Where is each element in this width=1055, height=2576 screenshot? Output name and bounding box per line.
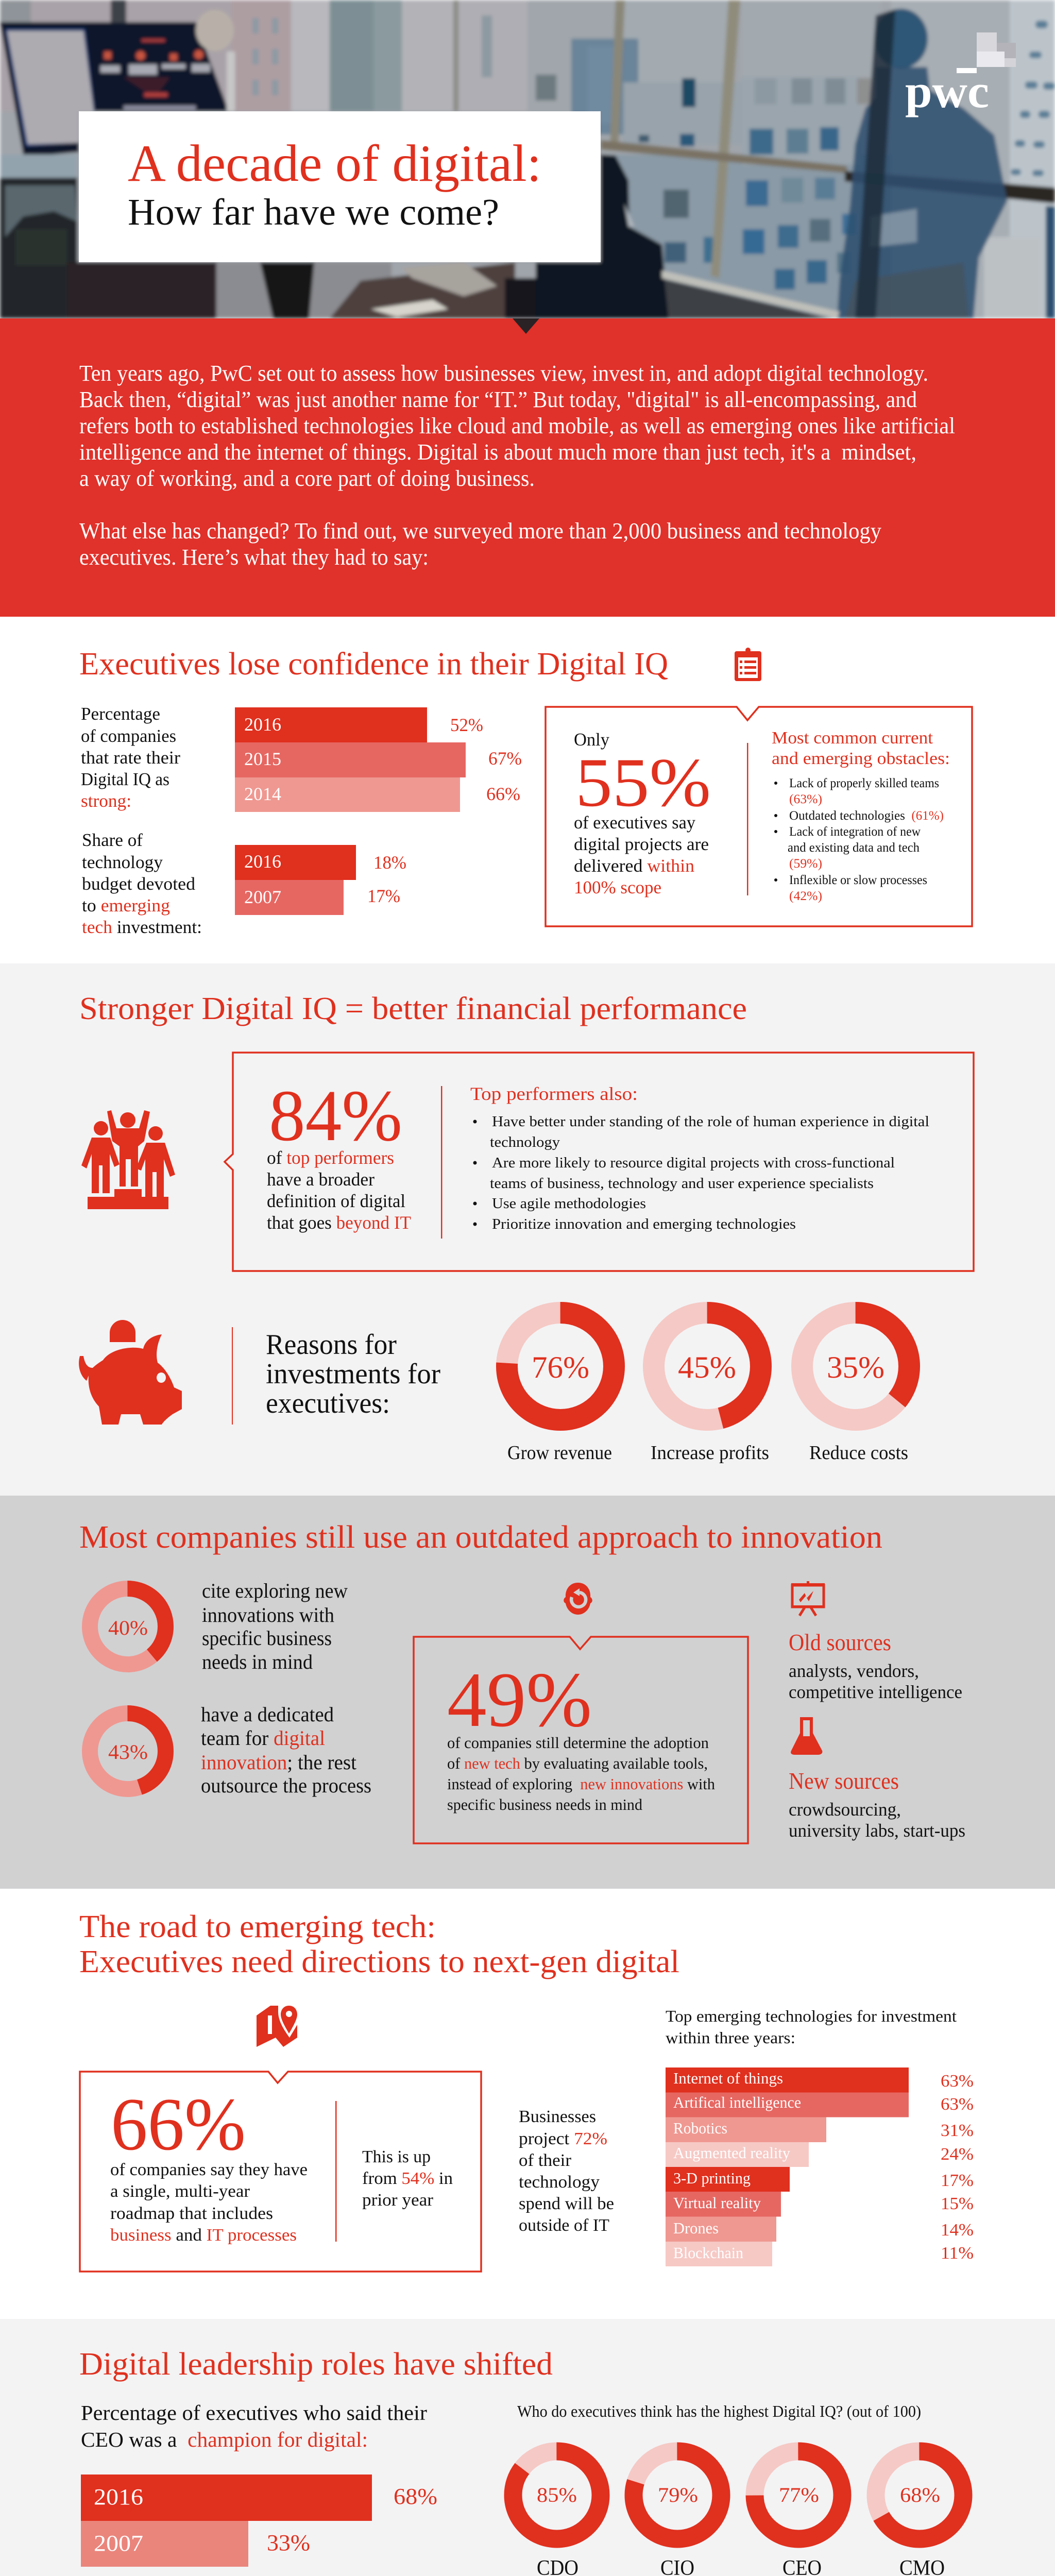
- text: cite exploring: cite exploring new: [202, 1579, 348, 1602]
- panel: hero photo: [0, 0, 1055, 318]
- callout: 49% adoption: of new tech by evaluating available tools,: [447, 1754, 708, 1772]
- obstacles list: Lack of integration of new: [789, 825, 921, 839]
- bar chart: budget share: [235, 845, 406, 915]
- bar chart: emerging technologies: Internet of things: [673, 2069, 783, 2087]
- intro text: Back then, “digital” was just another name for “IT.” But today, "digital" is all-encompassing, and: [79, 387, 917, 412]
- intro text: What else has changed? To find out, we surveyed more than 2,000 business and technology: [79, 518, 881, 544]
- bar chart: emerging technologies: 63%: [941, 2072, 974, 2091]
- chart: grow revenue 76%: 76%: [532, 1350, 589, 1384]
- chart: increase profits 45%: Increase profits: [651, 1442, 769, 1464]
- text: new sources: [789, 1768, 965, 1841]
- text: new sources: New sources: [789, 1768, 899, 1794]
- panel: title card: [79, 111, 601, 262]
- text: reasons for investments: investments for: [266, 1358, 440, 1390]
- text: share of budget: [82, 830, 202, 937]
- obstacles list: Inflexible or slow processes: [789, 873, 927, 887]
- panel: innovation: [0, 1496, 1055, 1889]
- callout: 84% top performers: that goes beyond IT: [267, 1212, 411, 1233]
- bar chart: emerging technologies: Augmented reality: [673, 2144, 790, 2162]
- bar chart: emerging technologies: [666, 2067, 974, 2266]
- text: reasons for investments: [266, 1329, 440, 1419]
- callout: 84% top performers: have a broader: [267, 1169, 375, 1190]
- icon: clipboard: [735, 648, 761, 681]
- callout: 49% adoption: instead of exploring new innovations with: [447, 1775, 715, 1793]
- obstacles list: and emerging obstacles:: [772, 749, 950, 768]
- heading: Executives lose confidence in their Digital IQ: [79, 647, 668, 682]
- text: businesses project 72%: Businesses: [519, 2107, 596, 2126]
- obstacles list: (59%): [789, 857, 822, 871]
- bar chart: emerging technologies: 63%: [941, 2095, 974, 2114]
- chart: reduce costs 35%: [802, 1313, 909, 1464]
- top performers list: Have better under standing of the role of human experience in digital: [492, 1113, 929, 1130]
- text: top emerging technologies: [666, 2007, 957, 2047]
- chart: increase profits 45%: [651, 1313, 769, 1464]
- bar chart: digital iq strong: 2015: [244, 749, 281, 769]
- intro text: refers both to established technologies like cloud and mobile, as well as emerging ones like artificial: [79, 413, 955, 438]
- obstacles list: (42%): [789, 889, 822, 903]
- text: reasons for investments: Reasons for: [266, 1329, 397, 1361]
- chart: 40% donut: [90, 1589, 166, 1664]
- bar chart: emerging technologies: 17%: [941, 2171, 974, 2190]
- bar chart: ceo champion: 2016: [94, 2484, 143, 2510]
- man silhouette: [874, 9, 928, 69]
- text: share of budget: technology: [82, 852, 163, 872]
- icon: piggy bank: [79, 1320, 182, 1425]
- obstacles list: [772, 728, 950, 903]
- panel: digital iq confidence: [0, 617, 1055, 963]
- bar chart: emerging technologies: 3-D printing: [673, 2169, 751, 2187]
- icon: map pin: [257, 2006, 297, 2047]
- text: dedicated team: innovation; the rest: [201, 1751, 356, 1774]
- text: new sources: university labs, start-ups: [789, 1820, 965, 1841]
- text: rate digital iq as strong: [81, 704, 180, 811]
- chart: grow revenue 76%: [507, 1313, 614, 1464]
- intro text: Ten years ago, PwC set out to assess how businesses view, invest in, and adopt digital technology.: [79, 361, 928, 386]
- icon: head with rotate arrow: [564, 1583, 592, 1615]
- text: cite exploring: [202, 1579, 348, 1673]
- icon: medal winners: [81, 1110, 175, 1209]
- text: top emerging technologies: within three years:: [666, 2028, 795, 2047]
- bar chart: emerging technologies: 11%: [941, 2244, 974, 2263]
- bar chart: budget share: 2016: [244, 851, 281, 872]
- dark woman right of box: [536, 155, 669, 318]
- bar chart: digital iq strong: [235, 707, 522, 812]
- top performers list: [470, 1083, 929, 1232]
- text: businesses project 72%: spend will be: [519, 2194, 614, 2213]
- pwc logo: pwc: [905, 65, 989, 117]
- callout: 66% roadmap: 66%: [111, 2082, 246, 2166]
- heading: Digital leadership roles have shifted: [79, 2347, 553, 2382]
- bar chart: digital iq strong: 67%: [488, 748, 522, 769]
- text: businesses project 72%: [519, 2107, 614, 2235]
- text: dedicated team: outsource the process: [201, 1774, 371, 1797]
- chair: [0, 178, 77, 318]
- callout: 66% roadmap: of companies say they have: [110, 2160, 308, 2179]
- text: businesses project 72%: technology: [519, 2173, 600, 2192]
- bar chart: emerging technologies: 24%: [941, 2145, 974, 2164]
- top performers list: Prioritize innovation and emerging technologies: [492, 1216, 796, 1232]
- text: reasons for investments: executives:: [266, 1387, 390, 1419]
- text: businesses project 72%: of their: [519, 2151, 572, 2170]
- obstacles list: and existing data and tech: [788, 841, 920, 855]
- callout: 66% roadmap: from 54% in: [362, 2169, 453, 2188]
- text: businesses project 72%: project 72%: [519, 2129, 607, 2148]
- chart: cio 79%: 79%: [658, 2483, 698, 2506]
- callout: 66% roadmap: roadmap that includes: [110, 2204, 273, 2223]
- left window below monitor: [0, 155, 77, 180]
- text: old sources: [789, 1629, 962, 1702]
- panel: intro: [0, 318, 1055, 617]
- text: old sources: Old sources: [789, 1629, 891, 1655]
- bar chart: emerging technologies: Artifical intelligence: [673, 2093, 801, 2111]
- text: new sources: crowdsourcing,: [789, 1799, 901, 1820]
- bar chart: budget share: 17%: [367, 886, 400, 906]
- text: share of budget: to emerging: [82, 895, 170, 916]
- text: cite exploring: needs in mind: [202, 1650, 313, 1673]
- chart: increase profits 45%: 45%: [678, 1350, 736, 1384]
- bar chart: budget share: 2007: [244, 887, 281, 907]
- text: dedicated team: [201, 1703, 371, 1797]
- text: share of budget: Share of: [82, 830, 143, 850]
- panel: leadership roles: [0, 2319, 1055, 2576]
- windows: [682, 78, 695, 107]
- bar chart: emerging technologies: 15%: [941, 2194, 974, 2213]
- callout: 49% adoption: specific business needs in mind: [447, 1795, 642, 1814]
- window frames: [610, 0, 625, 149]
- callout: 55% delivered within scope: Only: [574, 730, 609, 750]
- chart: cio 79%: [634, 2451, 721, 2576]
- obstacles list: Outdated technologies (61%): [789, 809, 944, 823]
- top performers list: Are more likely to resource digital projects with cross-functional: [492, 1155, 895, 1171]
- intro text: a way of working, and a core part of doing business.: [79, 466, 535, 491]
- chart: 43% donut: [90, 1714, 166, 1789]
- text: top emerging technologies: Top emerging technologies for investment: [666, 2007, 957, 2025]
- text: share of budget: budget devoted: [82, 874, 196, 894]
- callout: 66% roadmap: a single, multi-year: [110, 2182, 250, 2201]
- callout: 55% delivered within scope: 100% scope: [574, 877, 661, 897]
- callout: 66% roadmap: This is up: [362, 2147, 431, 2166]
- bar chart: emerging technologies: Robotics: [673, 2119, 727, 2137]
- panel: financial performance: [0, 963, 1055, 1496]
- text: rate digital iq as strong: that rate their: [81, 748, 180, 768]
- text: ceo champion: [81, 2401, 427, 2451]
- text: rate digital iq as strong: strong:: [81, 791, 131, 811]
- text: dedicated team: team for digital: [201, 1726, 325, 1750]
- chart: reduce costs 35%: 35%: [827, 1350, 884, 1384]
- subtitle: How far have we come?: [128, 191, 499, 233]
- bar chart: budget share: 18%: [373, 852, 406, 873]
- text: old sources: analysts, vendors,: [789, 1660, 919, 1681]
- bar chart: digital iq strong: 2014: [244, 784, 281, 804]
- obstacles list: (63%): [789, 792, 822, 806]
- heading: [79, 1909, 679, 1979]
- icon: presentation board: [791, 1581, 825, 1616]
- chart: ceo 77%: [755, 2451, 842, 2576]
- callout: 66% roadmap: prior year: [362, 2191, 434, 2210]
- right building ports: [1035, 21, 1048, 28]
- top performers list: teams of business, technology and user experience specialists: [490, 1175, 874, 1192]
- heading: Most companies still use an outdated approach to innovation: [79, 1520, 882, 1555]
- intro text: executives. Here’s what they had to say:: [79, 545, 429, 570]
- icon: flask: [791, 1717, 822, 1755]
- top performers list: Top performers also:: [470, 1083, 638, 1104]
- callout: 84% top performers: [225, 1053, 974, 1271]
- chart: 43% donut: 43%: [108, 1740, 148, 1764]
- text: ceo champion: CEO was a champion for digital:: [81, 2428, 368, 2451]
- monitor: [0, 22, 229, 157]
- bar chart: emerging technologies: 14%: [941, 2221, 974, 2240]
- chart: cmo 68%: 68%: [900, 2483, 940, 2506]
- callout: 66% roadmap: business and IT processes: [110, 2226, 297, 2245]
- text: rate digital iq as strong: of companies: [81, 726, 176, 746]
- bar chart: digital iq strong: 2016: [244, 714, 281, 735]
- top performers list: Use agile methodologies: [492, 1195, 646, 1212]
- callout: 55% delivered within scope: [546, 707, 972, 926]
- chart: cdo 85%: 85%: [537, 2483, 577, 2506]
- bar chart: emerging technologies: 31%: [941, 2121, 974, 2140]
- text: cite exploring: innovations with: [202, 1603, 334, 1626]
- chart: cdo 85%: [513, 2451, 601, 2576]
- callout: 84% top performers: of top performers: [267, 1147, 394, 1168]
- heading: The road to emerging tech:: [79, 1909, 436, 1944]
- text: dedicated team: have a dedicated: [201, 1703, 334, 1726]
- chart: grow revenue 76%: Grow revenue: [507, 1442, 612, 1464]
- text: who has highest digital iq: Who do executives think has the highest Digital IQ? (out of 100): [517, 2402, 921, 2420]
- intro text: intelligence and the internet of things. Digital is about much more than just tech, it's a mindset,: [79, 439, 916, 465]
- callout: 55% delivered within scope: delivered within: [574, 856, 694, 876]
- callout: 55% delivered within scope: digital projects are: [574, 834, 709, 854]
- bar chart: ceo champion: 68%: [394, 2484, 437, 2509]
- intro text: [79, 361, 955, 570]
- callout: 55% delivered within scope: of executives say: [574, 812, 695, 833]
- callout: 55% delivered within scope: 55%: [575, 744, 711, 821]
- chart: ceo 77%: 77%: [779, 2483, 819, 2506]
- bar chart: ceo champion: 33%: [267, 2530, 310, 2555]
- callout: 84% top performers: definition of digital: [267, 1191, 405, 1211]
- bar chart: emerging technologies: Virtual reality: [673, 2194, 761, 2212]
- text: businesses project 72%: outside of IT: [519, 2216, 609, 2235]
- text: cite exploring: specific business: [202, 1626, 332, 1650]
- people & table below box: [67, 262, 222, 318]
- chart: 40% donut: 40%: [108, 1616, 148, 1639]
- bar chart: emerging technologies: Drones: [673, 2219, 719, 2237]
- text: old sources: competitive intelligence: [789, 1682, 962, 1702]
- callout: 49% adoption: of companies still determine the adoption: [447, 1734, 709, 1752]
- bar chart: digital iq strong: 52%: [450, 715, 483, 735]
- bar chart: ceo champion: [81, 2475, 437, 2567]
- chart: reduce costs 35%: Reduce costs: [809, 1442, 908, 1464]
- heading: Executives need directions to next-gen digital: [79, 1944, 679, 1979]
- callout: 66% roadmap: [80, 2072, 481, 2272]
- title: A decade of digital:: [128, 134, 541, 193]
- text: rate digital iq as strong: Digital IQ as: [81, 769, 169, 789]
- heading: Stronger Digital IQ = better financial performance: [79, 991, 747, 1026]
- callout: 49% adoption: [414, 1637, 748, 1843]
- obstacles list: Most common current: [772, 728, 933, 748]
- pwc logo: [905, 32, 1016, 117]
- bar chart: ceo champion: 2007: [94, 2531, 143, 2556]
- callout: 84% top performers: 84%: [269, 1075, 402, 1156]
- bar chart: emerging technologies: Blockchain: [673, 2244, 743, 2262]
- text: share of budget: tech investment:: [82, 917, 202, 937]
- callout: 49% adoption: 49%: [447, 1656, 592, 1743]
- top performers list: technology: [490, 1134, 560, 1150]
- chart: cmo 68%: [876, 2451, 963, 2576]
- text: ceo champion: Percentage of executives who said their: [81, 2401, 427, 2425]
- panel: road to emerging tech: [0, 1889, 1055, 2319]
- bar chart: digital iq strong: 66%: [486, 784, 520, 804]
- obstacles list: Lack of properly skilled teams: [789, 776, 939, 790]
- text: rate digital iq as strong: Percentage: [81, 704, 160, 724]
